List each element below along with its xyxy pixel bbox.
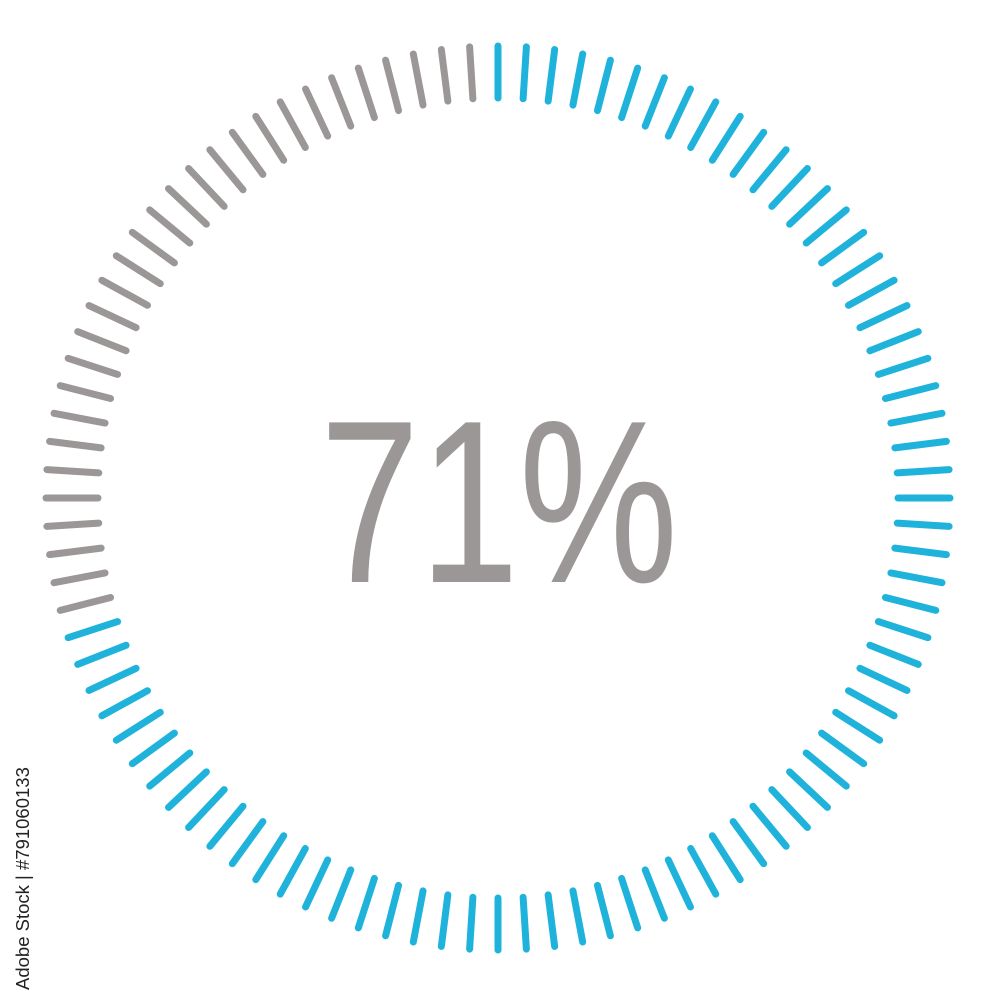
percentage label: 71% <box>320 373 678 632</box>
remaining ticks (gray) <box>46 47 473 610</box>
filled ticks (blue) <box>68 46 950 950</box>
watermark: stock id: Adobe Stock | #791060133 <box>12 767 33 990</box>
